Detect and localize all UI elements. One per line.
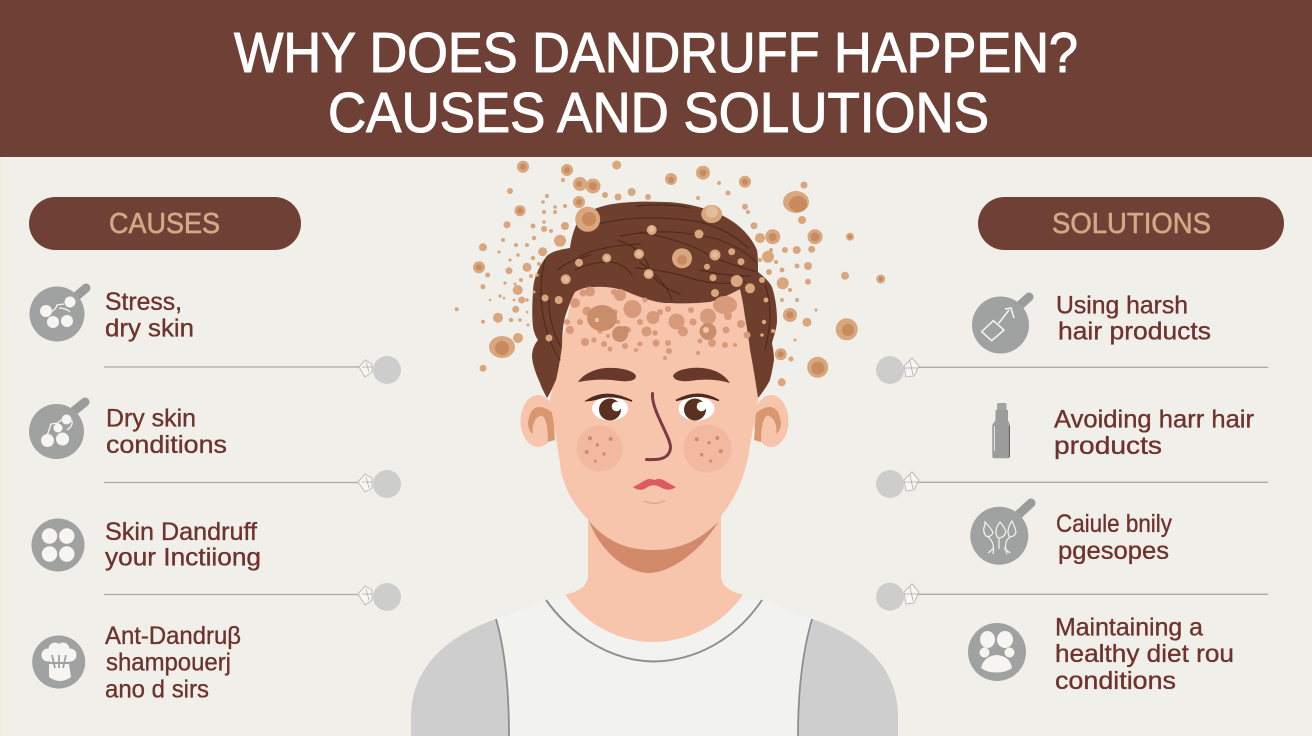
heading pill: causes (29, 197, 301, 250)
text: cause 2 (106, 404, 227, 459)
panel: causes list (29, 286, 401, 704)
text: solution 3 (1056, 510, 1172, 565)
icon: cause 1 (30, 286, 86, 342)
icon: solution 3 (970, 503, 1031, 565)
text: solution 2: Avoiding harr hair (1054, 406, 1254, 434)
icon: cause 3 (32, 518, 84, 572)
face (550, 285, 758, 550)
connector: solution 2 (876, 470, 1268, 498)
nose (646, 394, 671, 460)
icon: solution 2 bottle (992, 403, 1010, 458)
title (234, 21, 1078, 145)
text: cause 4: Ant-Dandruβ (105, 622, 241, 650)
icon: solution 1 (972, 296, 1029, 354)
eyebrows (578, 368, 730, 383)
text: solution 4: conditions (1055, 667, 1176, 695)
eyes (587, 394, 719, 420)
text: cause 1: dry skin (105, 314, 194, 342)
cheeks with spots (576, 424, 732, 472)
neck (566, 515, 743, 642)
text: cause 1: Stress, (105, 288, 182, 316)
ears (520, 395, 788, 447)
heading pill: causes: CAUSES (109, 208, 220, 240)
text: cause 4 (105, 622, 241, 704)
text: cause 2: conditions (106, 431, 227, 459)
title: CAUSES AND SOLUTIONS (328, 81, 989, 145)
connector: cause 2 (104, 470, 401, 498)
text: cause 1 (105, 288, 194, 342)
connector: solution 1 (876, 356, 1268, 384)
text: solution 3: pgesopes (1058, 537, 1169, 565)
heading pill: solutions (978, 197, 1284, 250)
text: cause 3 (105, 518, 261, 572)
text: solution 2: products (1054, 432, 1162, 460)
connector: solution 3 (876, 583, 1268, 611)
mouth (633, 479, 676, 503)
text: solution 1: hair products (1058, 318, 1211, 346)
hair (532, 202, 777, 398)
flakes on hair and around head (455, 160, 885, 386)
connector: cause 3 (104, 583, 401, 611)
header banner (0, 0, 1312, 157)
heading pill: solutions: SOLUTIONS (1052, 208, 1211, 240)
icon: cause 4 (32, 636, 85, 688)
text: solution 3: Caiule bnily (1056, 510, 1172, 538)
text: cause 4: shampouerj (106, 648, 231, 676)
text: solution 2 (1054, 406, 1254, 460)
text: cause 3: Skin Dandruff (105, 518, 257, 546)
text: solution 4 (1055, 614, 1234, 695)
shirt (411, 600, 898, 736)
icon: solution 4 paw (968, 623, 1026, 681)
illustration: person with dandruff (411, 160, 898, 736)
text: solution 4: Maintaining a (1055, 614, 1203, 642)
panel: solutions list (876, 292, 1268, 695)
title: WHY DOES DANDRUFF HAPPEN? (234, 21, 1078, 85)
text: solution 1 (1056, 292, 1211, 346)
text: cause 2: Dry skin (106, 404, 196, 432)
text: solution 1: Using harsh (1056, 292, 1188, 320)
scalp flakes on forehead (564, 286, 750, 360)
text: solution 4: healthy diet rou (1055, 640, 1234, 668)
text: cause 4: ano d sirs (105, 676, 209, 704)
text: cause 3: your Inctiiong (105, 544, 261, 572)
icon: cause 2 (29, 402, 85, 459)
connector: cause 1 (104, 356, 401, 384)
